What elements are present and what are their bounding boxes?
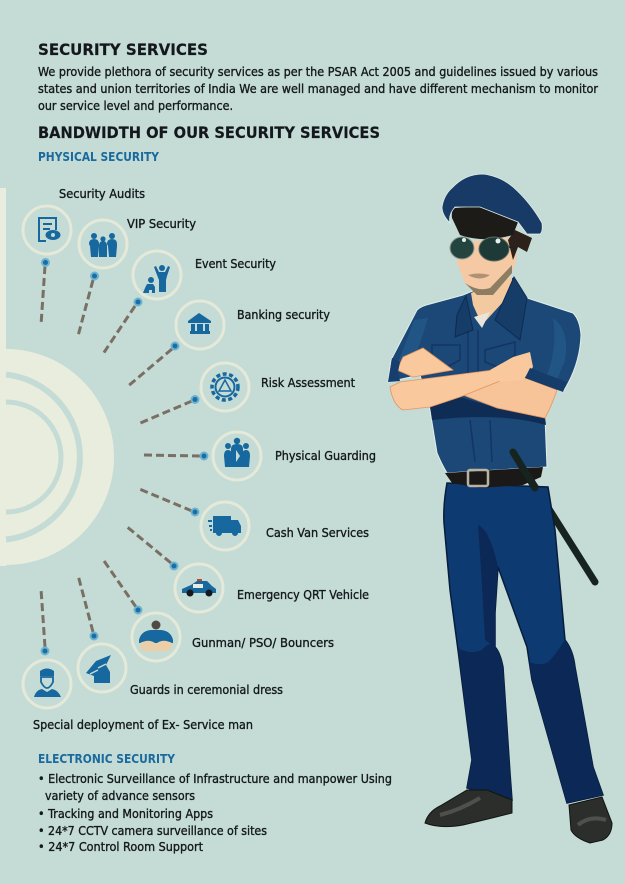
shirt pockets and placket — [432, 330, 515, 395]
electronic security bullet list: • 24*7 CCTV camera surveillance of sites — [38, 824, 267, 838]
shirt shadow under arms — [430, 397, 546, 425]
arm: left forearm — [390, 370, 500, 410]
electronic security bullet list: variety of advance sensors — [45, 789, 195, 803]
electronic security bullet list: • Electronic Surveillance of Infrastructure and manpower Using — [38, 772, 392, 786]
item: special deployment of ex-servicemen: Special deployment of Ex- Service man — [33, 718, 253, 732]
heading: bandwidth: BANDWIDTH OF OUR SECURITY SERVICES — [38, 123, 380, 142]
item: risk assessment: Risk Assessment — [261, 376, 355, 390]
baton lower section — [513, 452, 595, 582]
item: guards in ceremonial dress — [78, 575, 283, 697]
item: gunman pso bouncers — [102, 558, 334, 661]
collar — [455, 277, 527, 340]
intro text block: We provide plethora of security services as per the PSAR Act 2005 and guidelines issued by various — [38, 65, 598, 79]
cap crown — [442, 174, 542, 234]
shoes — [425, 790, 612, 843]
radial hub semicircle — [0, 188, 114, 566]
arm: right forearm — [463, 377, 557, 418]
trousers lower shading — [458, 640, 603, 803]
item: emergency qrt vehicle: Emergency QRT Vehicle — [237, 588, 369, 602]
hair — [508, 230, 532, 260]
item: special deployment of ex-servicemen — [23, 589, 253, 732]
item: risk assessment — [138, 363, 355, 424]
item: vip security — [78, 217, 196, 336]
subheading: electronic security: ELECTRONIC SECURITY — [38, 752, 175, 766]
item: guards in ceremonial dress: Guards in ceremonial dress — [130, 683, 283, 697]
item: emergency qrt vehicle — [126, 526, 369, 612]
item: security audits: Security Audits — [59, 187, 145, 201]
belt — [445, 467, 543, 488]
right hand — [490, 352, 533, 382]
item: physical guarding: Physical Guarding — [275, 449, 376, 463]
item: cash van services — [137, 488, 369, 550]
item: cash van services: Cash Van Services — [266, 526, 369, 540]
intro text block: states and union territories of India We are well managed and have different mechanism to monitor — [38, 82, 598, 96]
item: security audits — [23, 187, 145, 325]
belt buckle — [468, 470, 488, 486]
electronic security bullet list: • 24*7 Control Room Support — [38, 840, 203, 854]
trousers — [444, 483, 603, 803]
item: banking security — [127, 301, 330, 387]
neck — [471, 277, 512, 325]
shirt placket lower — [470, 420, 492, 462]
intro text block — [38, 65, 598, 113]
intro text block: our service level and performance. — [38, 99, 233, 113]
baton handle — [513, 452, 535, 488]
electronic security bullet list — [38, 772, 392, 854]
subheading: physical security: PHYSICAL SECURITY — [38, 150, 159, 164]
beard — [465, 265, 512, 295]
electronic security bullet list: • Tracking and Monitoring Apps — [38, 807, 213, 821]
left sleeve cuff — [388, 358, 400, 382]
item: banking security: Banking security — [237, 308, 330, 322]
shirt — [388, 277, 581, 473]
item: gunman pso bouncers: Gunman/ PSO/ Bouncers — [192, 636, 334, 650]
left hand — [397, 348, 453, 377]
cap visor — [452, 206, 518, 239]
item: physical guarding — [141, 432, 376, 480]
item: event security: Event Security — [195, 257, 276, 271]
inner thigh shading — [478, 525, 498, 647]
sleeve shading — [397, 318, 566, 385]
sunglasses — [450, 237, 517, 261]
right sleeve cuff — [525, 368, 567, 392]
item: vip security: VIP Security — [127, 217, 196, 231]
illustration: police officer — [388, 174, 612, 843]
title: security services: SECURITY SERVICES — [38, 40, 208, 59]
item: event security — [103, 251, 276, 354]
face — [457, 237, 517, 295]
